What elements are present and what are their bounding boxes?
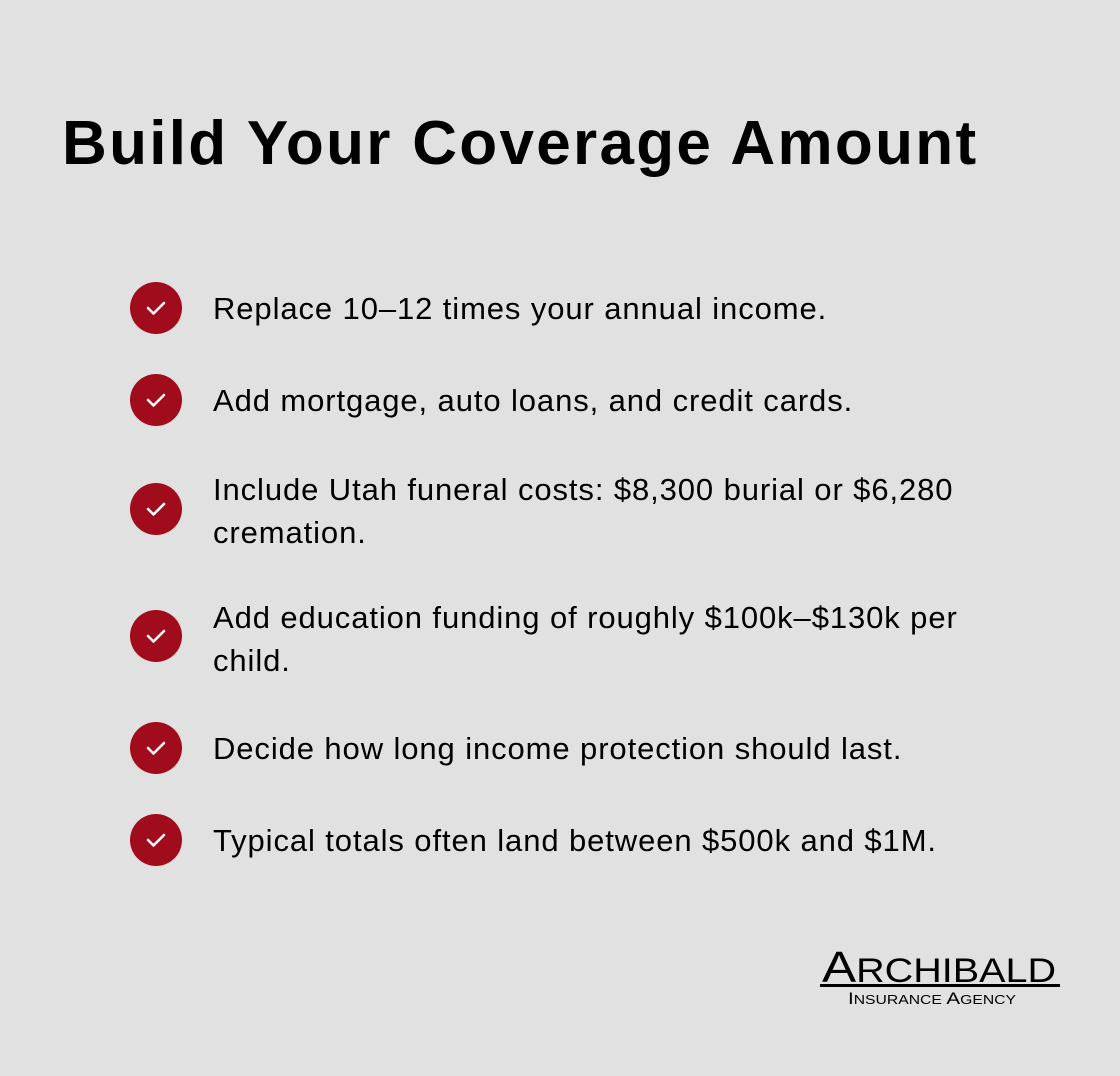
item 3: [130, 472, 953, 550]
icon: check: [130, 483, 182, 535]
logo: [820, 943, 1060, 1008]
text: Replace 10–12 times your annual income.: [213, 291, 827, 326]
title: Build Your Coverage Amount: [62, 109, 978, 178]
logo: ARCHIBALD: [822, 943, 1056, 992]
icon: check: [130, 610, 182, 662]
text: Typical totals often land between $500k and $1M.: [213, 823, 937, 858]
item 4: [130, 600, 958, 678]
text: Add mortgage, auto loans, and credit cards.: [213, 383, 853, 418]
text: Add education funding of roughly $100k–$130k per child.: [213, 600, 958, 678]
item 1: [130, 282, 827, 334]
item 5: [130, 722, 902, 774]
icon: check: [130, 282, 182, 334]
text: Decide how long income protection should last.: [213, 731, 902, 766]
icon: check: [130, 374, 182, 426]
logo: INSURANCE AGENCY: [848, 989, 1016, 1008]
item 2: [130, 374, 853, 426]
icon: check: [130, 814, 182, 866]
icon: check: [130, 722, 182, 774]
text: Include Utah funeral costs: $8,300 burial or $6,280 cremation.: [213, 472, 953, 550]
item 6: [130, 814, 937, 866]
